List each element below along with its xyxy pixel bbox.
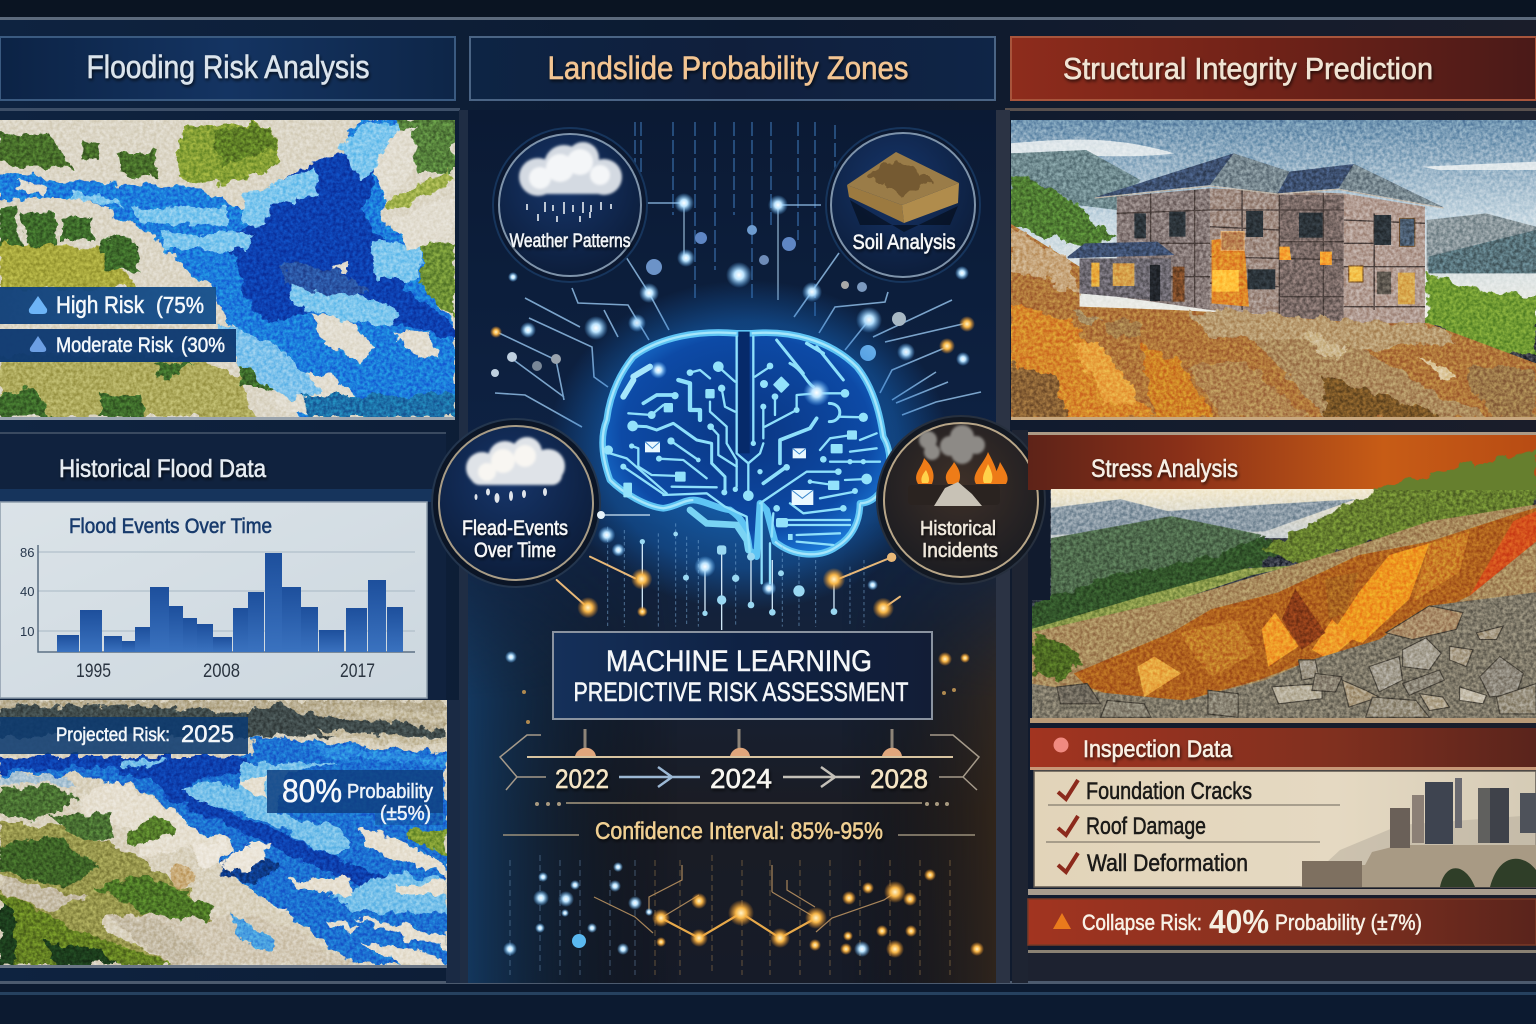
circle: Weather Patterns: Weather Patterns	[510, 231, 630, 252]
callout: Projected Risk 2025: 2025	[181, 721, 234, 748]
heading: Historical Flood Data: Historical Flood Data	[59, 455, 266, 483]
callout: Collapse Risk 40%: Probability (±7%)	[1275, 910, 1422, 935]
circuit network: connectors to brain	[495, 203, 981, 427]
icon: cloud with drops	[466, 437, 565, 503]
callout: Projected Risk 2025	[0, 717, 248, 754]
icon: warning triangle	[1053, 913, 1071, 929]
divider with dots	[535, 802, 949, 806]
legend: Moderate Risk 30%: Moderate Risk	[56, 334, 173, 357]
bar chart: Flood Events Over Time: 10	[20, 624, 34, 639]
icon: rain cloud	[519, 142, 622, 222]
bar chart: Flood Events Over Time: 1995	[76, 661, 111, 682]
bar chart: Flood Events Over Time: 40	[20, 584, 34, 599]
heading: Stress Analysis: Stress Analysis	[1091, 455, 1238, 483]
callout: Collapse Risk 40%	[1028, 899, 1536, 945]
callout: Collapse Risk 40%: Collapse Risk:	[1082, 910, 1202, 935]
rubble in front of house	[1103, 310, 1459, 360]
arrow: 2024 to 2028	[783, 767, 860, 787]
bar chart: Flood Events Over Time	[0, 502, 427, 698]
flood map: satellite view with risk zones	[0, 120, 455, 417]
checklist: inspection items: Wall Deformation	[1087, 850, 1248, 877]
heading: Structural Integrity Prediction: Structural Integrity Prediction	[1063, 51, 1433, 86]
bar chart: Flood Events Over Time: 2008	[203, 661, 240, 682]
checklist: inspection items	[1034, 771, 1536, 887]
legend: High Risk 75%	[0, 287, 216, 324]
heading: Landslide Probability Zones: Landslide Probability Zones	[548, 50, 908, 86]
circle: Soil Analysis	[826, 128, 980, 282]
panel: center column background	[446, 110, 1028, 983]
heading: Landslide Probability Zones	[470, 37, 995, 100]
circuit network: dots and orange connectors under brain	[557, 511, 900, 630]
image: landslide with exposed rock	[1030, 450, 1536, 721]
heading: Flooding Risk Analysis: Flooding Risk Analysis	[86, 49, 370, 85]
circle: Flood Events Over Time	[432, 419, 600, 587]
icon: status dot	[1054, 738, 1068, 752]
heading: Inspection Data: Inspection Data	[1083, 736, 1233, 763]
circle: Historical Incidents	[877, 416, 1045, 584]
arrow: 2022 to 2024	[619, 767, 700, 787]
circle: Historical Incidents: Incidents	[922, 540, 998, 562]
heading: Structural Integrity Prediction	[1011, 37, 1536, 100]
circle: Historical Incidents: Historical	[920, 518, 996, 540]
timeline: 2022 to 2028: 2028	[870, 764, 928, 794]
callout: 80% Probability: (±5%)	[380, 803, 431, 825]
checklist: inspection items: Foundation Cracks	[1086, 778, 1252, 805]
box: Machine Learning Predictive Risk Assessment: MACHINE LEARNING	[606, 645, 872, 678]
decorative sparkles beside box	[505, 651, 970, 724]
bar chart: Flood Events Over Time: 86	[20, 545, 34, 560]
timeline: 2022 to 2028: 2024	[710, 763, 772, 794]
icon: fire and smoke	[908, 425, 1008, 506]
legend: Moderate Risk 30%: (30%	[181, 334, 225, 357]
image: damaged house on eroding hillside	[1010, 120, 1536, 418]
legend: High Risk 75%: (75%	[156, 292, 204, 318]
timeline: 2022 to 2028	[500, 729, 979, 794]
checklist: inspection items: Roof Damage	[1086, 813, 1206, 840]
circuit background: vertical data streams	[635, 122, 835, 320]
circle: Soil Analysis: Soil Analysis	[852, 231, 956, 254]
text: confidence interval: Confidence Interval: 85%-95%	[595, 818, 883, 845]
legend: Moderate Risk 30%	[0, 329, 236, 362]
legend: High Risk 75%: High Risk	[56, 292, 145, 319]
bar chart: Flood Events Over Time: Flood Events Over Time	[69, 515, 272, 538]
heading: Flooding Risk Analysis	[0, 37, 455, 100]
callout: 80% Probability: Probability	[347, 781, 433, 803]
box: Machine Learning Predictive Risk Assessment	[553, 632, 932, 719]
panel: Historical Flood Data	[0, 432, 446, 700]
flood map: projected risk	[0, 700, 447, 965]
circle: Weather Patterns	[493, 128, 647, 282]
icon: soil block	[847, 152, 959, 232]
icon: glowing AI brain with circuits	[548, 280, 948, 610]
circle: Flood Events Over Time: Flead-Events	[462, 517, 568, 540]
circuit nodes: glowing dots upper	[490, 193, 975, 377]
callout: Collapse Risk 40%: 40%	[1209, 903, 1269, 940]
box: Machine Learning Predictive Risk Assessment: PREDICTIVE RISK ASSESSMENT	[574, 677, 908, 707]
circle: Flood Events Over Time: Over Time	[474, 539, 556, 562]
panel: Inspection Data	[1030, 728, 1536, 770]
panel: Stress Analysis	[1028, 432, 1536, 490]
bar chart: Flood Events Over Time: 2017	[340, 661, 375, 682]
callout: Projected Risk 2025: Projected Risk:	[56, 725, 170, 746]
callout: 80% Probability: 80%	[282, 773, 342, 809]
image: city skyline	[1300, 778, 1536, 887]
timeline: 2022 to 2028: 2022	[555, 764, 609, 794]
circuit network: bottom data nodes	[503, 855, 984, 975]
house	[1068, 153, 1444, 323]
callout: 80% Probability	[267, 770, 443, 825]
